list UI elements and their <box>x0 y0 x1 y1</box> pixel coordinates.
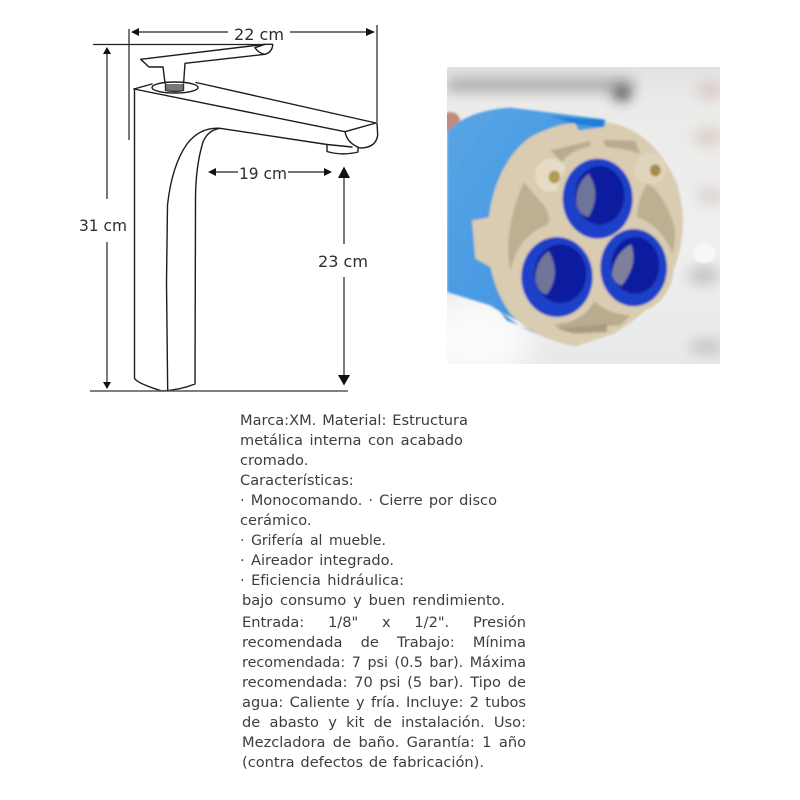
blue seal: top <box>563 159 633 239</box>
faucet aerator <box>327 144 358 154</box>
specifications text block: recomendada: 70 psi (5 bar). Tipo de <box>242 674 526 691</box>
faucet handle <box>141 44 273 83</box>
specifications text block: recomendada: 7 psi (0.5 bar). Máxima <box>242 655 526 671</box>
specifications text block: de abasto y kit de instalación. Uso: <box>242 714 526 731</box>
cream disc <box>487 122 683 346</box>
dimension: 19 cm <box>208 164 332 183</box>
peg left <box>535 159 567 192</box>
faucet body <box>134 89 220 391</box>
photo background blur <box>417 79 725 380</box>
dimension: 19 cm: 19 cm <box>239 164 287 183</box>
dimension: 23 cm <box>318 166 368 386</box>
blue cylinder <box>447 108 607 343</box>
dimension: 23 cm: 23 cm <box>318 252 368 271</box>
specifications text block: · Grifería al mueble. <box>240 533 386 549</box>
specifications text block: bajo consumo y buen rendimiento. <box>242 592 505 609</box>
specifications text block: Entrada: 1/8" x 1/2". Presión <box>242 614 526 631</box>
specifications text block: cerámico. <box>240 512 312 529</box>
specifications text block: Mezcladora de baño. Garantía: 1 año <box>242 734 526 751</box>
technical drawing: faucet with dimensions <box>79 25 378 392</box>
blue seal: lower left <box>521 237 593 317</box>
faucet line drawing <box>134 44 378 391</box>
cartridge <box>440 108 683 346</box>
disc recesses <box>550 141 590 162</box>
specifications text block: Marca:XM. Material: Estructura <box>240 412 468 429</box>
specifications text block: cromado. <box>240 452 308 469</box>
dimension: 31 cm: 31 cm <box>79 216 127 235</box>
peg right <box>634 153 666 184</box>
faucet spout underside <box>220 128 352 147</box>
photo: ceramic cartridge close-up <box>447 67 720 364</box>
faucet spout top <box>134 82 378 148</box>
specifications text block: (contra defectos de fabricación). <box>242 754 484 771</box>
specifications text block: recomendada de Trabajo: Mínima <box>242 634 526 651</box>
faucet base ring and cartridge <box>152 82 198 93</box>
specifications text block: Características: <box>240 472 354 489</box>
specifications text block: · Monocomando. · Cierre por disco <box>240 492 497 509</box>
collars <box>556 152 638 245</box>
specifications text block: · Aireador integrado. <box>240 552 394 569</box>
blue seal: lower right <box>600 229 667 306</box>
dimension: 22 cm <box>129 25 377 140</box>
specifications text block: · Eficiencia hidráulica: <box>240 572 404 589</box>
dimension: 31 cm <box>79 47 127 389</box>
ground line <box>90 390 348 392</box>
top reference line <box>93 44 265 46</box>
specifications text block: metálica interna con acabado <box>240 432 463 449</box>
specifications text block: agua: Caliente y fría. Incluye: 2 tubos <box>242 694 526 711</box>
dimension: 22 cm: 22 cm <box>234 25 284 44</box>
